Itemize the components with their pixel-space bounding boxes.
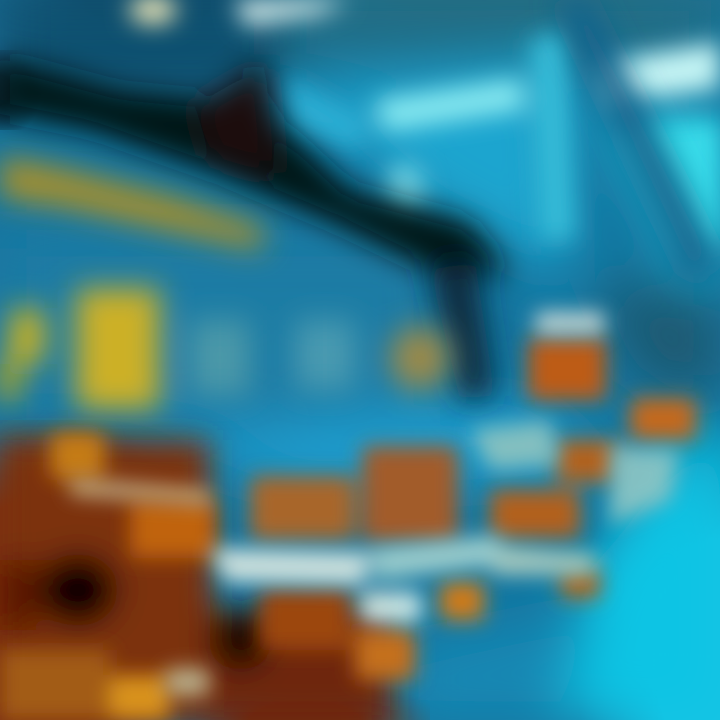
highlights: upper windows: [129, 0, 720, 250]
yellow band and blocks: [0, 156, 450, 410]
dark diagonal beam: [0, 0, 720, 400]
orange crates: [0, 338, 696, 720]
bottom left dark orange mass: [0, 440, 390, 720]
pale crate tops: [70, 312, 680, 696]
